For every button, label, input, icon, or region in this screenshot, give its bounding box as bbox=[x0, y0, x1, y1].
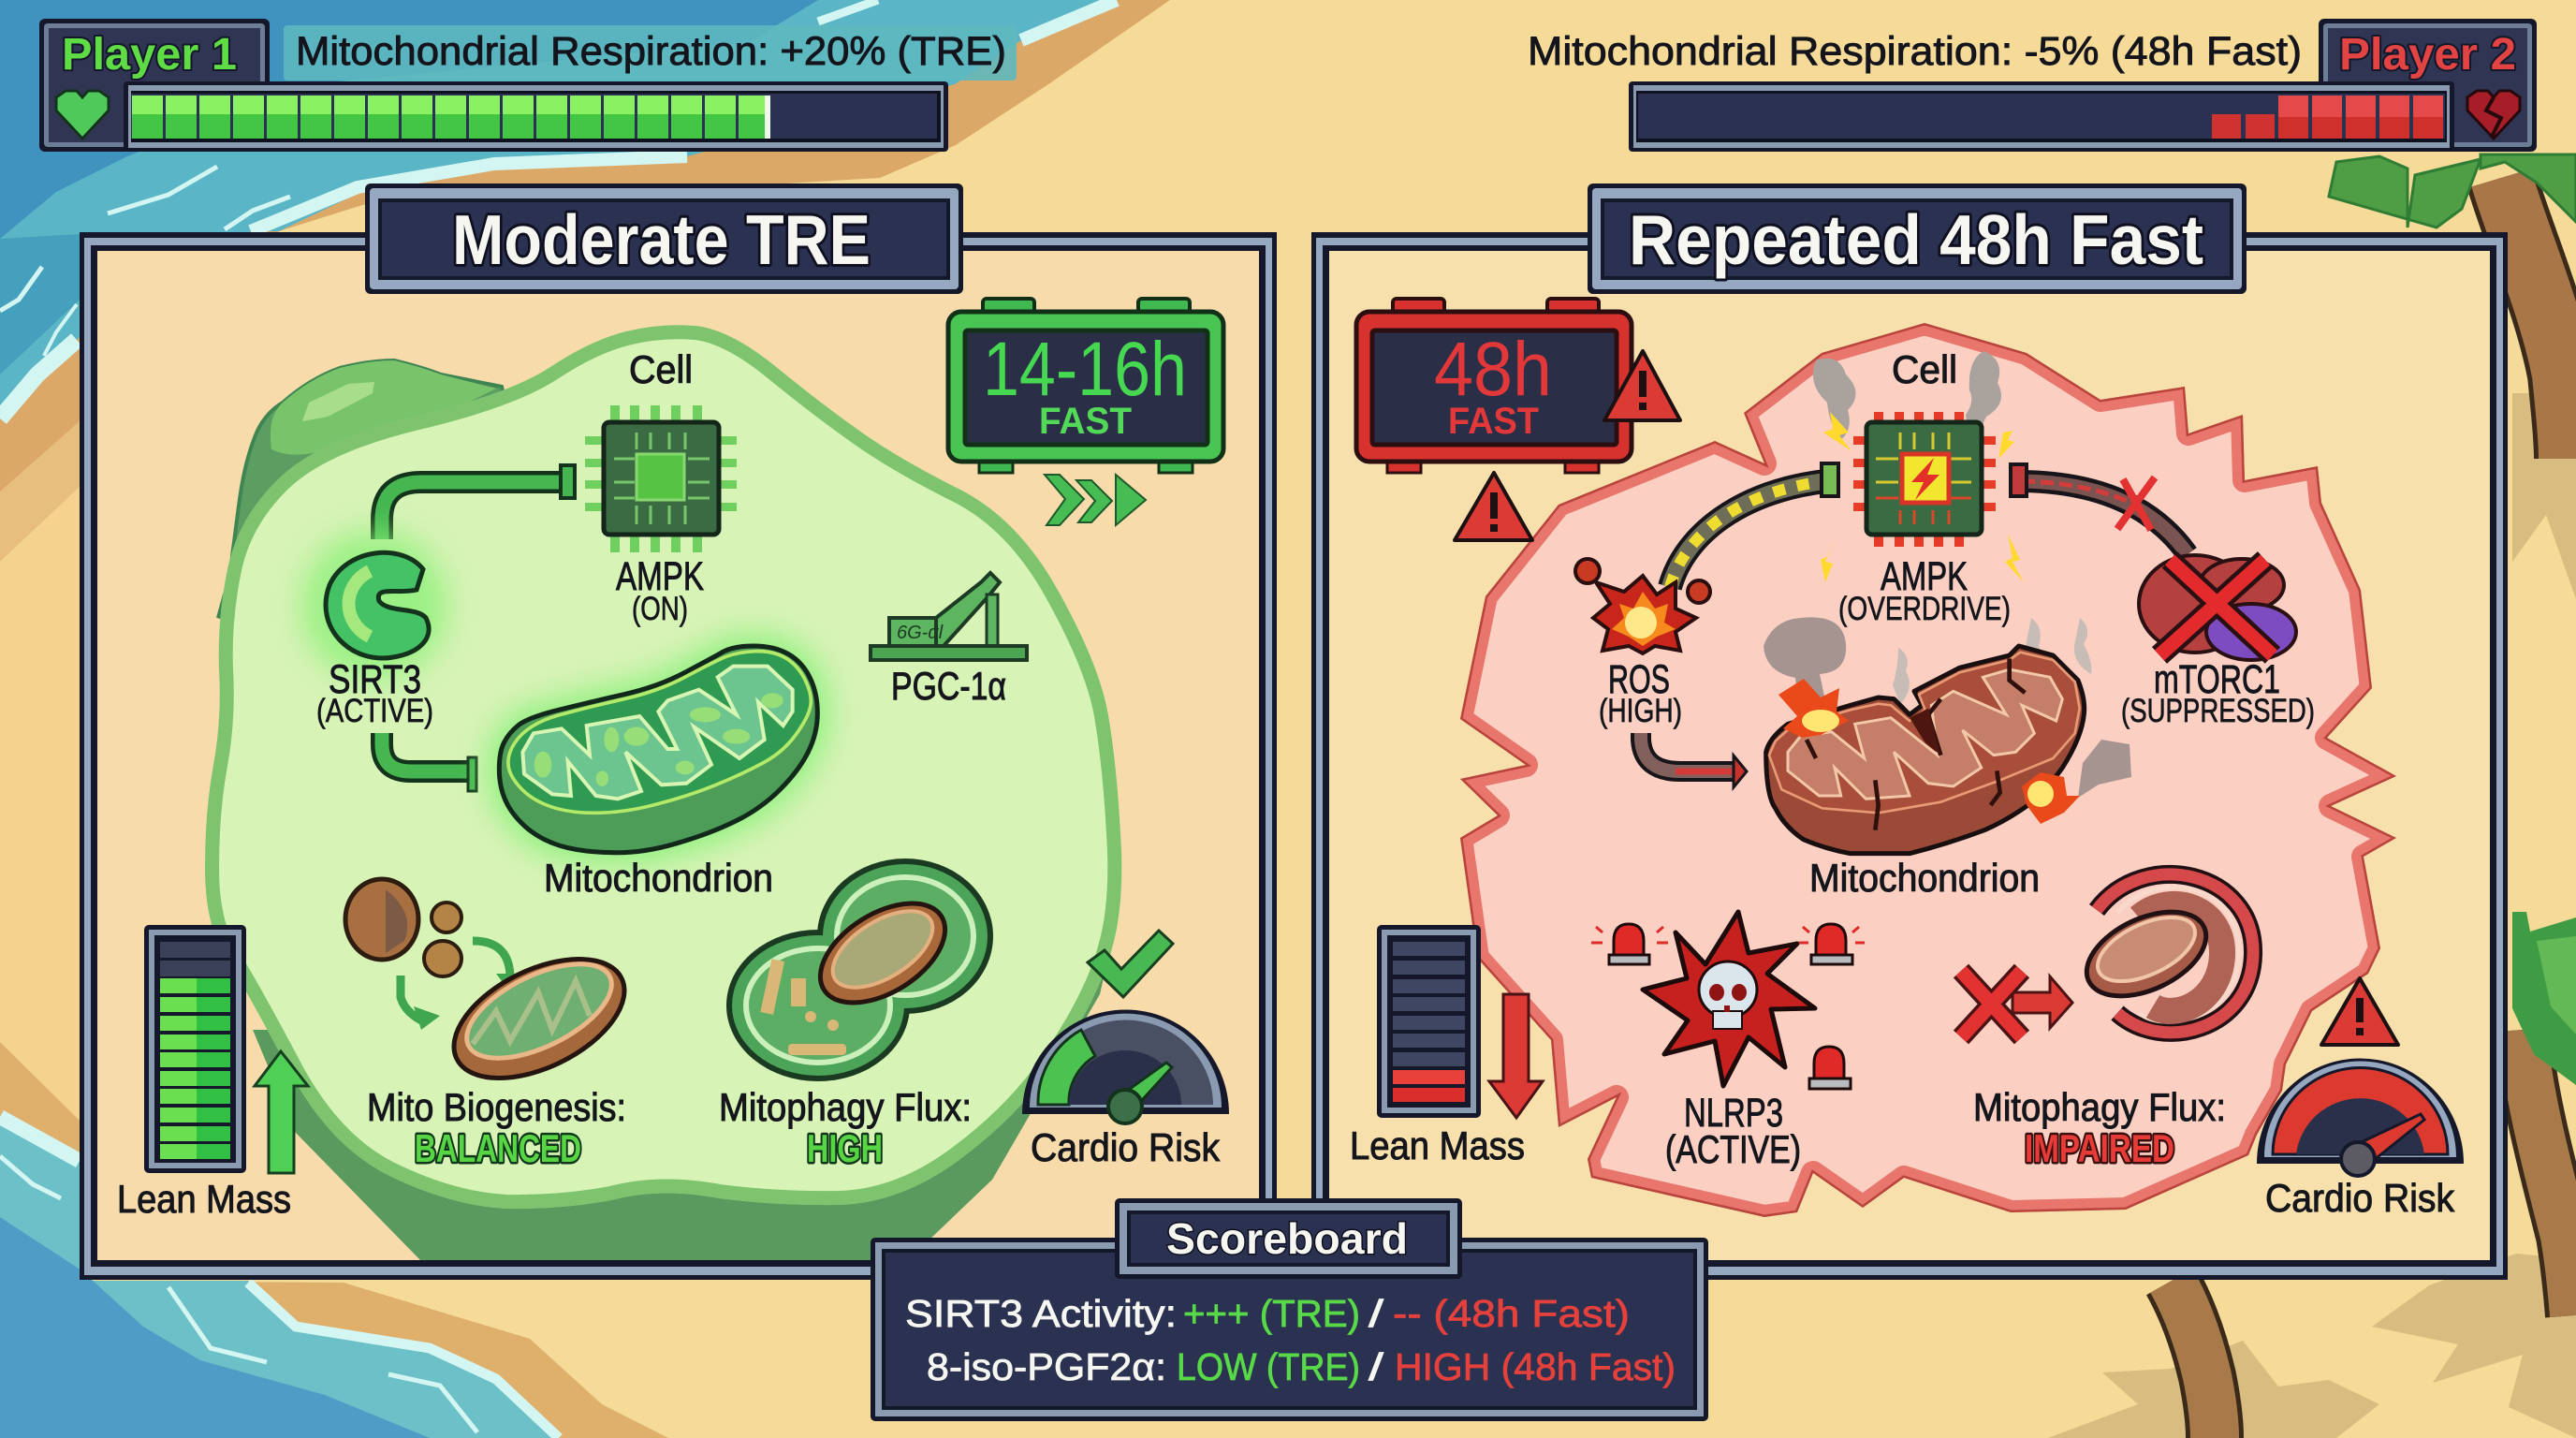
HUD: player 2 bbox=[1528, 19, 2537, 152]
icon: warning triangle bbox=[1455, 473, 1532, 540]
icon: 14-16h timer: FAST bbox=[1039, 401, 1132, 442]
icon: SIRT3 enzyme bbox=[301, 531, 447, 681]
label: mito biogenesis balanced: BALANCED bbox=[415, 1126, 581, 1170]
icon: small red X bbox=[2117, 477, 2155, 530]
label: NLRP3 active: NLRP3 bbox=[1684, 1091, 1783, 1136]
icon: healthy mitochondrion bbox=[499, 646, 817, 854]
palm tree bottom bbox=[2172, 1281, 2215, 1438]
palm tree top right bbox=[2329, 154, 2576, 459]
icon: siren bbox=[1799, 924, 1865, 964]
label: mitochondrion: Mitochondrion bbox=[544, 856, 773, 900]
label: AMPK overdrive bbox=[1838, 554, 2011, 627]
chart: cardio risk gauge low bbox=[1022, 1009, 1229, 1123]
connector: SIRT3 to AMPK bbox=[382, 465, 575, 539]
stat: respiration TRE: Mitochondrial Respiration: +20% (TRE) bbox=[296, 29, 1006, 74]
icon: mito biogenesis bbox=[345, 879, 643, 1103]
label: AMPK overdrive: AMPK bbox=[1881, 554, 1968, 599]
player 2 tag bbox=[2319, 19, 2537, 152]
label: AMPK on bbox=[616, 554, 704, 627]
label: mitochondrion: Mitochondrion bbox=[1809, 856, 2040, 900]
icon: green heart bbox=[56, 91, 109, 139]
lean mass gauge: low bbox=[1377, 925, 1481, 1118]
stat: SIRT3 activity: +++ (TRE) bbox=[1183, 1292, 1360, 1335]
label: lean mass: Lean Mass bbox=[117, 1177, 291, 1221]
label: AMPK on: AMPK bbox=[616, 554, 704, 599]
icon: 14-16h timer: 14-16h bbox=[983, 327, 1187, 412]
player 2 tag: Player 2 bbox=[2339, 30, 2516, 80]
stat: 8-iso-PGF2 alpha bbox=[927, 1345, 1676, 1388]
scoreboard tab: Scoreboard bbox=[1166, 1214, 1408, 1263]
smoke: above chip bbox=[1813, 351, 2001, 443]
palm shadows bbox=[2048, 393, 2576, 1438]
label: mitophagy flux impaired: IMPAIRED bbox=[2025, 1126, 2174, 1170]
arrow: lean mass down bbox=[1489, 994, 1543, 1118]
connector: ROS to AMPK strained bbox=[1670, 463, 1838, 587]
health bar: player 1 bbox=[124, 81, 948, 152]
label: AMPK on: (ON) bbox=[632, 591, 688, 627]
HUD: player 1 bbox=[39, 19, 1017, 152]
stat: SIRT3 activity: -- (48h Fast) bbox=[1393, 1292, 1630, 1335]
icon: mTORC1 suppressed bbox=[2139, 555, 2296, 660]
label: PGC-1 alpha: PGC-1α bbox=[891, 664, 1006, 708]
label: NLRP3 active: (ACTIVE) bbox=[1665, 1127, 1801, 1171]
connector: AMPK to mTORC1 blocked bbox=[2011, 464, 2188, 554]
scoreboard tab bbox=[1115, 1198, 1462, 1279]
label: ROS high bbox=[1599, 657, 1682, 729]
label: SIRT3 active: SIRT3 bbox=[329, 657, 421, 702]
arrow: lean mass up bbox=[255, 1051, 308, 1173]
label: mitophagy flux high: HIGH bbox=[807, 1126, 883, 1170]
icon: burst right bbox=[2022, 772, 2080, 824]
arrows: forward bbox=[1045, 475, 1146, 525]
top-left shoreline bbox=[0, 0, 1170, 562]
chart: cardio risk gauge high bbox=[2257, 1058, 2464, 1176]
connector: SIRT3 to mitochondrion bbox=[382, 733, 476, 791]
stat: 8-iso-PGF2 alpha: HIGH (48h Fast) bbox=[1395, 1345, 1676, 1388]
icon: blocked flux arrow bbox=[1961, 971, 2072, 1037]
stat: 8-iso-PGF2 alpha: LOW (TRE) bbox=[1177, 1345, 1360, 1388]
icon: PGC-1 alpha bbox=[871, 573, 1027, 660]
label: mito biogenesis balanced bbox=[367, 1085, 626, 1170]
health bar: player 2 bbox=[1629, 81, 2454, 152]
icon: burst left bbox=[1778, 679, 1849, 738]
stat: 8-iso-PGF2 alpha: / bbox=[1368, 1345, 1384, 1388]
stat: 8-iso-PGF2 alpha: 8-iso-PGF2α: bbox=[927, 1345, 1166, 1388]
cell body: damaged bbox=[1460, 323, 2396, 1217]
panel: Repeated 48h Fast bbox=[1311, 232, 2508, 1280]
icon: warning triangle bbox=[1604, 351, 1680, 420]
icon: 14-16h timer bbox=[948, 299, 1223, 473]
title tab: Repeated 48h Fast: Repeated 48h Fast bbox=[1629, 200, 2203, 279]
icon: siren bbox=[1591, 924, 1668, 964]
label: SIRT3 active bbox=[316, 657, 433, 729]
label: cell: Cell bbox=[629, 347, 693, 391]
stat: SIRT3 activity bbox=[905, 1292, 1630, 1335]
icon: PGC-1 alpha: 6G-αl bbox=[897, 623, 944, 643]
icon: 48h timer: 48h bbox=[1434, 327, 1552, 412]
lean mass gauge: high bbox=[144, 925, 246, 1173]
label: cell: Cell bbox=[1892, 347, 1957, 391]
icon: ROS explosion bbox=[1575, 559, 1710, 653]
title tab: Moderate TRE bbox=[365, 183, 963, 294]
label: ROS high: ROS bbox=[1608, 657, 1670, 702]
connector: ROS to mitochondrion bbox=[1641, 733, 1747, 787]
icon: 48h timer: FAST bbox=[1448, 401, 1539, 442]
icon: warning triangle bbox=[2321, 978, 2398, 1045]
label: SIRT3 active: (ACTIVE) bbox=[316, 693, 433, 729]
panel: Moderate TRE bbox=[80, 232, 1277, 1280]
label: mTORC1 suppressed bbox=[2121, 657, 2315, 729]
label: mitophagy flux high bbox=[719, 1085, 972, 1170]
icon: siren bbox=[1809, 1047, 1851, 1089]
label: mitophagy flux high: Mitophagy Flux: bbox=[719, 1085, 972, 1129]
icon: broken heart bbox=[2467, 91, 2520, 139]
label: AMPK overdrive: (OVERDRIVE) bbox=[1838, 591, 2011, 627]
player 1 tag bbox=[39, 19, 270, 152]
icon: NLRP3 spiked inflammasome bbox=[1643, 912, 1815, 1086]
icon: overdriven AMPK chip bbox=[1821, 412, 2024, 582]
label: mito biogenesis balanced: Mito Biogenesis: bbox=[367, 1085, 626, 1129]
icon: failed autophagosome bbox=[2073, 874, 2253, 1033]
label: mTORC1 suppressed: mTORC1 bbox=[2154, 657, 2280, 702]
player 1 tag: Player 1 bbox=[62, 30, 237, 80]
cell body: green bbox=[205, 325, 1121, 1260]
label: cardio risk: Cardio Risk bbox=[1031, 1125, 1221, 1169]
stat: respiration 48h: Mitochondrial Respiration: -5% (48h Fast) bbox=[1528, 29, 2302, 74]
icon: mitophagy autophagosome bbox=[726, 858, 993, 1081]
label: ROS high: (HIGH) bbox=[1599, 693, 1682, 729]
label: NLRP3 active bbox=[1665, 1091, 1801, 1171]
label: mitophagy flux impaired: Mitophagy Flux: bbox=[1973, 1085, 2226, 1129]
icon: AMPK chip bbox=[585, 405, 737, 552]
bottom-left shoreline bbox=[0, 1042, 668, 1438]
title tab: Repeated 48h Fast bbox=[1588, 183, 2247, 294]
palm tree bottom right bbox=[2512, 912, 2576, 1315]
label: mitophagy flux impaired bbox=[1973, 1085, 2226, 1170]
label: mTORC1 suppressed: (SUPPRESSED) bbox=[2121, 693, 2315, 729]
stat: SIRT3 activity: SIRT3 Activity: bbox=[905, 1292, 1177, 1335]
icon: check mark bbox=[1088, 931, 1173, 997]
icon: 48h timer bbox=[1356, 299, 1632, 473]
label: lean mass: Lean Mass bbox=[1350, 1123, 1525, 1167]
label: cardio risk: Cardio Risk bbox=[2265, 1176, 2455, 1220]
icon: damaged mitochondrion bbox=[1766, 646, 2085, 854]
scoreboard panel bbox=[871, 1198, 1708, 1421]
smoke: damaged mitochondrion bbox=[1764, 617, 2131, 798]
stat: SIRT3 activity: / bbox=[1368, 1292, 1384, 1335]
title tab: Moderate TRE: Moderate TRE bbox=[452, 200, 871, 279]
